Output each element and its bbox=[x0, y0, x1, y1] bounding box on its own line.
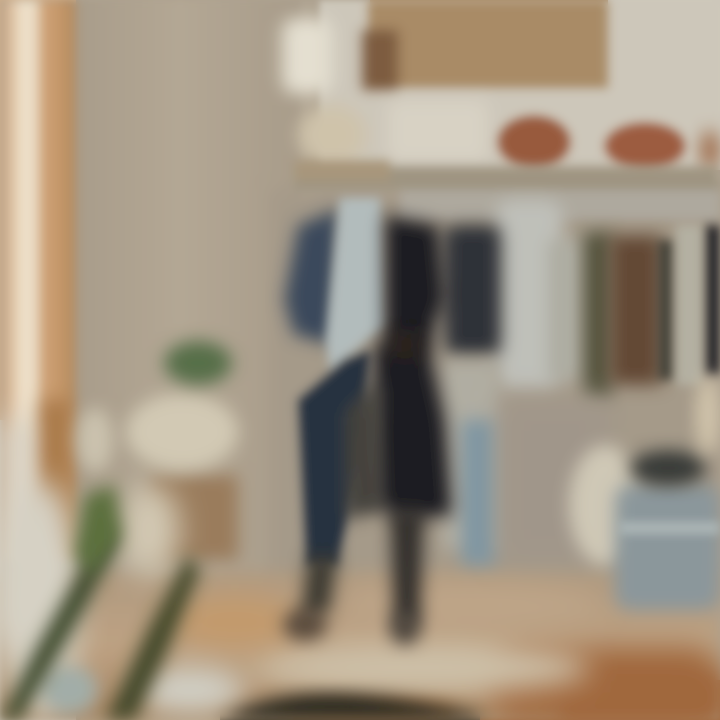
foreground plant leaves bbox=[0, 485, 480, 720]
foreground pale blur lower left bbox=[0, 480, 246, 720]
wall lamp bbox=[282, 18, 332, 94]
jacket left bbox=[284, 208, 340, 345]
floor bbox=[0, 572, 720, 720]
shirt bbox=[326, 198, 384, 372]
person bbox=[283, 198, 452, 645]
trousers left leg bbox=[298, 350, 370, 565]
curtain bbox=[0, 0, 76, 640]
armchair bbox=[569, 375, 720, 610]
jacket right bbox=[385, 215, 445, 350]
cork board bbox=[362, 0, 608, 90]
clothes on rail bbox=[442, 200, 720, 565]
side table with plant bbox=[77, 341, 238, 560]
shelf items: white box and terracotta pots bbox=[298, 100, 720, 170]
hands bbox=[387, 329, 423, 361]
dark coat lower bbox=[372, 330, 452, 520]
left lower leg bbox=[300, 555, 338, 625]
shoes bbox=[283, 609, 327, 641]
right leg bbox=[390, 510, 424, 625]
shelf bbox=[295, 160, 720, 220]
